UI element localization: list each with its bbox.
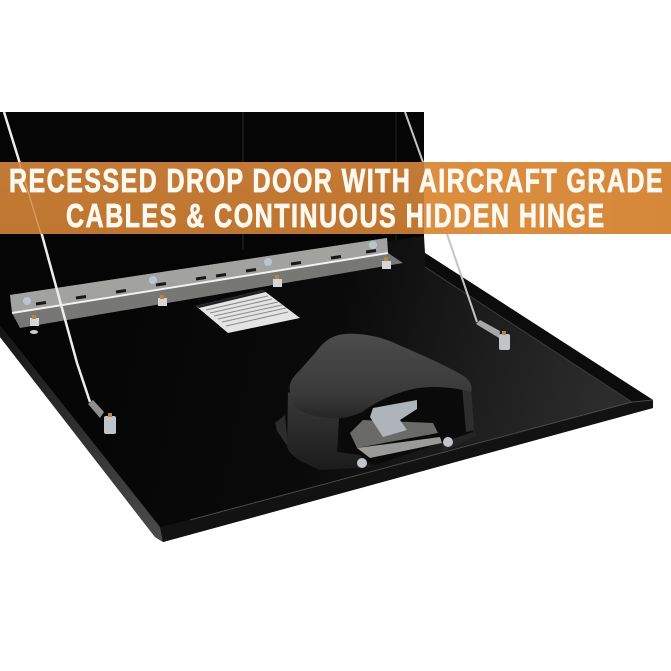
right cable bbox=[405, 112, 510, 350]
hinge bolts bbox=[30, 257, 391, 334]
latch bolts bbox=[357, 437, 453, 468]
instruction label bbox=[196, 290, 300, 333]
latch metal plate bbox=[350, 420, 442, 458]
door latch bbox=[275, 334, 477, 470]
banner headline bbox=[9, 163, 663, 235]
continuous hinge bbox=[10, 238, 403, 334]
latch base flange bbox=[275, 415, 288, 447]
latch hood front bbox=[287, 392, 372, 470]
back panel of the toolbox bbox=[0, 112, 424, 310]
open drop door bbox=[0, 236, 653, 542]
latch right jamb bbox=[462, 385, 474, 432]
left cable bbox=[4, 112, 116, 434]
latch opening bbox=[339, 385, 473, 465]
latch handle chrome bbox=[370, 400, 417, 437]
banner bbox=[0, 162, 671, 235]
latch hood top bbox=[289, 334, 472, 418]
banner headline: CABLES & CONTINUOUS HIDDEN HINGE bbox=[66, 198, 604, 235]
banner headline: RECESSED DROP DOOR WITH AIRCRAFT GRADE bbox=[9, 163, 663, 200]
